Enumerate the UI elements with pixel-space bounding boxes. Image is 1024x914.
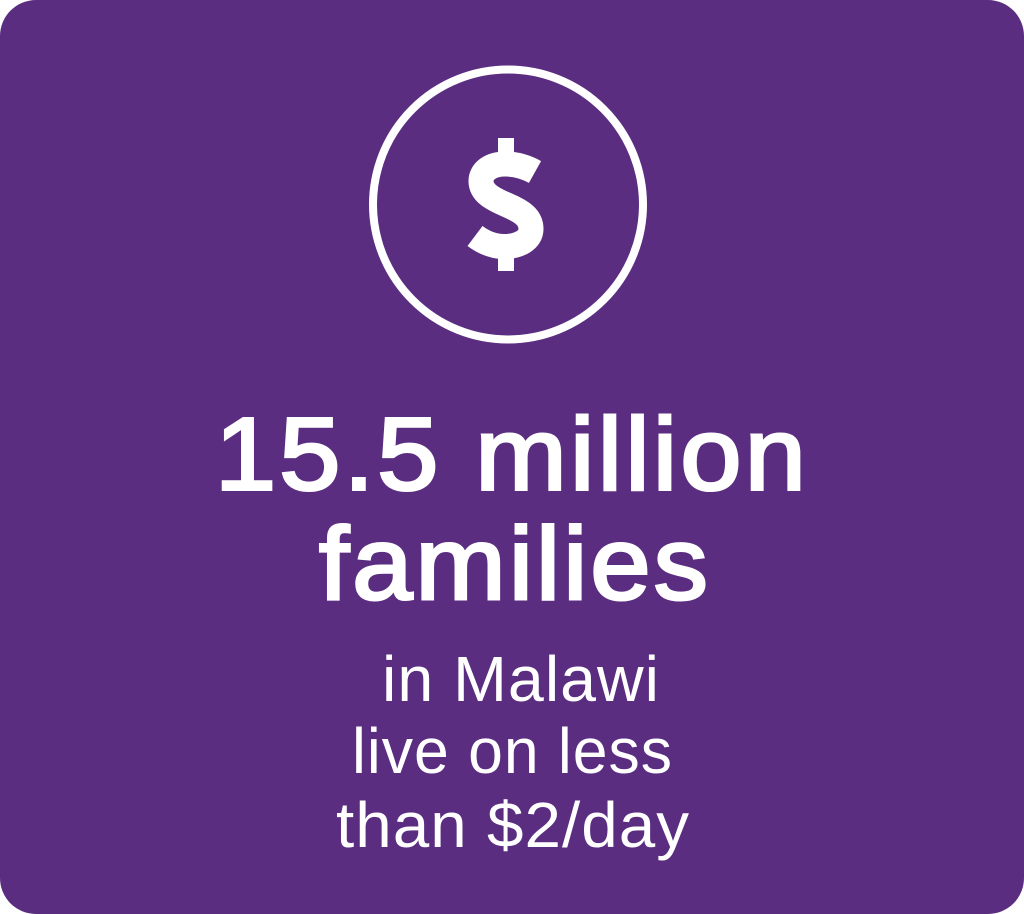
text: than $2/day: than $2/day	[336, 789, 690, 861]
heading: families: families	[319, 506, 711, 621]
icon: dollar coin	[373, 70, 643, 340]
heading: 15.5 million: 15.5 million	[215, 396, 809, 512]
text: in Malawi: in Malawi	[382, 643, 660, 715]
text: live on less: live on less	[352, 715, 673, 787]
